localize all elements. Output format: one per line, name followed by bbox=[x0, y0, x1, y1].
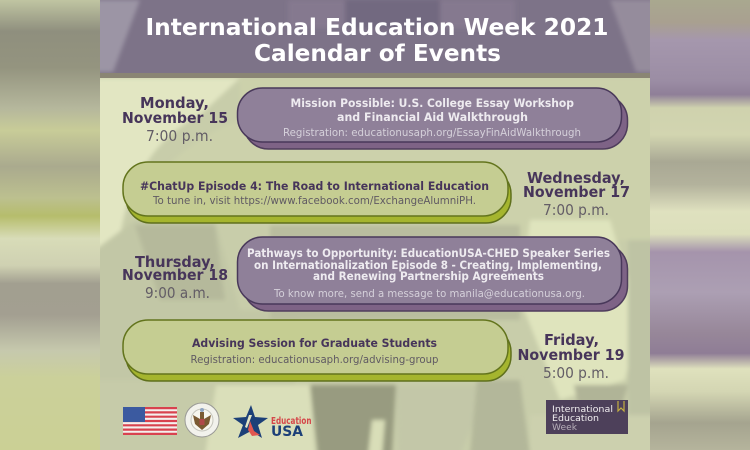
date: Wednesday: 7:00 p.m. bbox=[543, 201, 609, 219]
icon: US flag bbox=[123, 407, 177, 435]
pill: Mission Possible: Mission Possible: U.S. College Essay Workshop bbox=[290, 96, 574, 110]
date: Monday: November 15 bbox=[122, 109, 228, 127]
pill: ChatUp: To tune in, visit https://www.facebook.com/ExchangeAlumniPH. bbox=[152, 195, 476, 207]
title: International Education Week 2021 bbox=[146, 15, 608, 41]
pill: Pathways to Opportunity: on Internationalization Episode 8 - Creating, Implementing, bbox=[254, 258, 602, 272]
date: Thursday: Thursday, bbox=[135, 253, 215, 271]
pill: Pathways to Opportunity bbox=[238, 237, 628, 311]
date: Friday bbox=[518, 331, 624, 382]
logo: International Education Week: Week bbox=[552, 423, 578, 433]
pill: Pathways to Opportunity: To know more, send a message to manila@educationusa.org. bbox=[273, 288, 585, 300]
date: Thursday: November 18 bbox=[122, 266, 228, 284]
pill: Pathways to Opportunity: Pathways to Opportunity: EducationUSA-CHED Speaker Series bbox=[247, 246, 610, 260]
event 3: Thursday bbox=[122, 237, 628, 311]
icon: bookmark bbox=[618, 401, 624, 411]
icon: star bbox=[233, 405, 268, 438]
logo: EducationUSA: USA bbox=[271, 424, 303, 440]
pill: Advising Session bbox=[123, 320, 511, 381]
date: Thursday: 9:00 a.m. bbox=[145, 284, 210, 302]
event 4: Friday bbox=[123, 320, 624, 382]
date: Wednesday bbox=[523, 169, 630, 219]
event 2: Wednesday bbox=[123, 162, 630, 223]
logo: EducationUSA: Education bbox=[271, 416, 312, 427]
header band bbox=[95, 0, 655, 78]
date: Wednesday: November 17 bbox=[523, 183, 630, 201]
building columns and window bbox=[95, 0, 655, 72]
pill: ChatUp bbox=[123, 162, 511, 223]
pill: Pathways to Opportunity: and Renewing Partnership Agreements bbox=[313, 269, 544, 283]
date: Wednesday: Wednesday, bbox=[527, 169, 625, 187]
pill: Advising Session: Registration: educationusaph.org/advising-group bbox=[190, 354, 439, 366]
date: Monday: 7:00 p.m. bbox=[146, 127, 213, 145]
blurred background left side bbox=[0, 0, 100, 450]
date: Friday: November 19 bbox=[518, 346, 624, 364]
title bbox=[146, 15, 608, 67]
logo: International Education Week: International bbox=[552, 405, 613, 415]
pill: Mission Possible bbox=[238, 88, 628, 149]
date: Monday bbox=[122, 94, 228, 145]
blurred background right side bbox=[650, 0, 750, 450]
event 1: Monday bbox=[122, 88, 628, 149]
title: Calendar of Events bbox=[254, 41, 501, 67]
date: Monday: Monday, bbox=[140, 94, 209, 112]
date: Friday: 5:00 p.m. bbox=[543, 364, 609, 382]
pill: ChatUp: #ChatUp Episode 4: The Road to International Education bbox=[140, 179, 489, 193]
pill: Mission Possible: and Financial Aid Walkthrough bbox=[337, 110, 528, 124]
pill: Mission Possible: Registration: educationusaph.org/EssayFinAidWalkthrough bbox=[283, 127, 581, 139]
date: Thursday bbox=[122, 253, 228, 302]
icon: US Embassy seal bbox=[185, 403, 219, 437]
logo: EducationUSA bbox=[233, 405, 312, 440]
logo: International Education Week bbox=[546, 400, 628, 434]
logo: International Education Week: Education bbox=[552, 414, 599, 424]
pill: Advising Session: Advising Session for Graduate Students bbox=[192, 336, 437, 350]
date: Friday: Friday, bbox=[544, 331, 599, 349]
photo background of students bbox=[95, 78, 655, 450]
